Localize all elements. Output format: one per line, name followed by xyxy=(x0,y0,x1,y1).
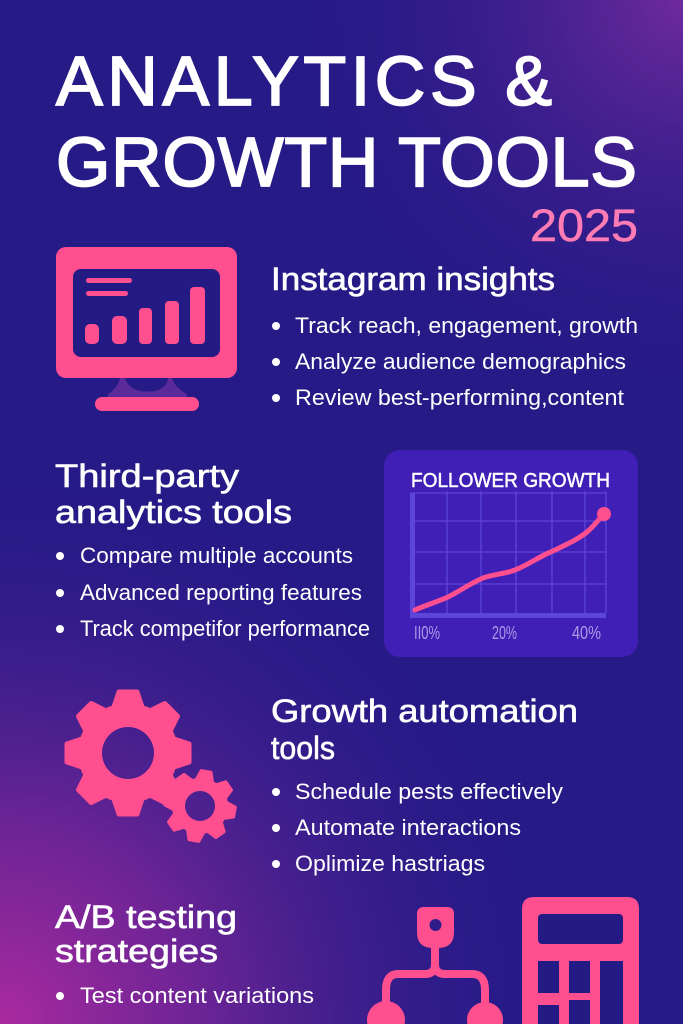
section: Growth automation tools xyxy=(271,693,578,876)
section: Instagram insights: Instagram insights xyxy=(271,261,555,297)
section: Instagram insights: Track reach, engagement, growth xyxy=(295,313,638,338)
section: Third-party analytics tools: Track competifor performance xyxy=(80,616,370,641)
icon: flow diagram xyxy=(367,907,503,1024)
section: Instagram insights: Analyze audience demographics xyxy=(295,349,626,374)
section: A/B testing strategies: Test content variations xyxy=(80,983,314,1008)
section: Growth automation tools: Growth automation xyxy=(271,693,578,729)
section: Instagram insights xyxy=(271,261,638,410)
section: Growth automation tools: tools xyxy=(271,730,335,766)
icon: calculator xyxy=(522,897,639,1024)
section: Third-party analytics tools: Advanced reporting features xyxy=(80,580,362,605)
section: Third-party analytics tools: Third-party xyxy=(55,458,239,494)
section: Growth automation tools: Automate interactions xyxy=(295,815,521,840)
chart title: FOLLOWER GROWTH xyxy=(411,470,610,492)
title xyxy=(56,42,637,201)
axis labels: 20% xyxy=(492,623,517,643)
line chart xyxy=(410,491,611,618)
section: Growth automation tools: Oplimize hastriags xyxy=(295,851,485,876)
section: Growth automation tools: Schedule pests effectively xyxy=(295,779,563,804)
year: 2025 xyxy=(530,200,638,251)
axis labels xyxy=(414,623,601,643)
panel: follower growth chart xyxy=(384,450,638,657)
axis labels: II0% xyxy=(414,623,440,643)
section: A/B testing strategies xyxy=(55,899,314,1024)
title: ANALYTICS & xyxy=(56,42,552,120)
section: A/B testing strategies: strategies xyxy=(55,933,218,969)
section: Instagram insights: Review best-performing,content xyxy=(295,385,624,410)
icon: monitor with bar chart xyxy=(56,247,237,411)
section: Third-party analytics tools: Compare multiple accounts xyxy=(80,543,353,568)
section: A/B testing strategies: A/B testing xyxy=(55,899,237,935)
section: Third-party analytics tools: analytics tools xyxy=(55,494,292,530)
axis labels: 40% xyxy=(572,623,601,643)
icon: gears xyxy=(67,692,236,842)
title: GROWTH TOOLS xyxy=(56,123,637,201)
section: Third-party analytics tools xyxy=(55,458,370,641)
